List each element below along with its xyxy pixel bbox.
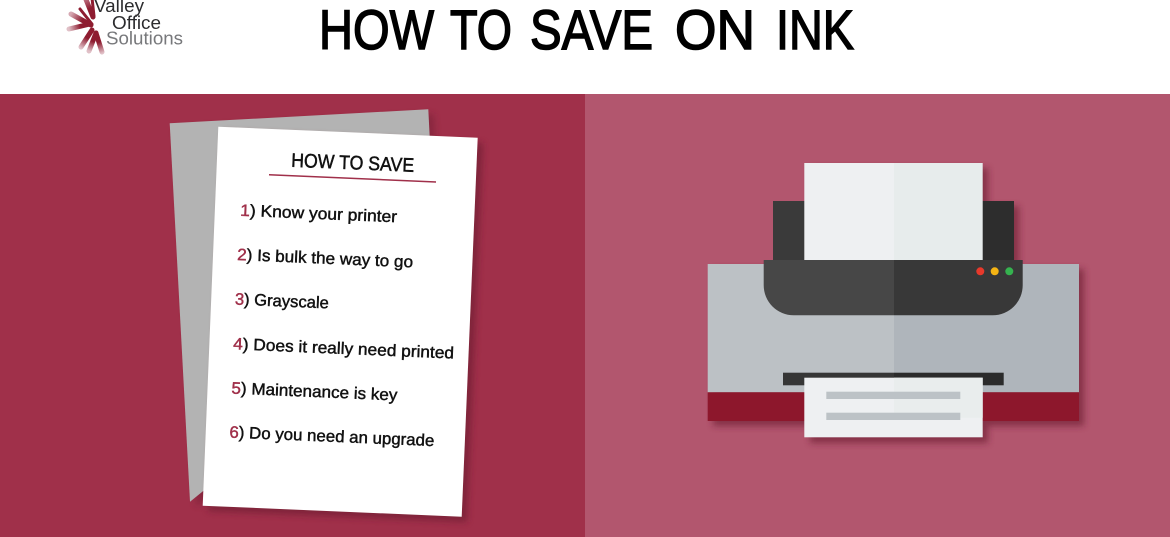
grey back sheet <box>170 109 445 507</box>
top cover <box>764 260 894 315</box>
title <box>319 0 854 61</box>
item 5: 5) Maintenance is key <box>231 380 399 404</box>
printed lines <box>826 392 960 399</box>
item 6: 6) Do you need an upgrade <box>229 424 435 450</box>
logo wordmark: Office <box>112 12 161 33</box>
white header band <box>0 0 1170 94</box>
list items <box>229 202 454 450</box>
item 2: 2) Is bulk the way to go <box>237 246 413 271</box>
status lights <box>976 267 1013 275</box>
output paper <box>804 378 983 437</box>
icon: pinwheel of maroon arrows <box>69 0 102 52</box>
logo wordmark: Solutions <box>106 27 183 48</box>
input paper <box>804 163 894 260</box>
stacked sheets with list <box>170 109 483 522</box>
icon: printer <box>708 163 1084 443</box>
printer body <box>708 264 894 392</box>
item 3: 3) Grayscale <box>235 291 329 312</box>
heading underline <box>269 175 436 182</box>
white front sheet <box>203 127 483 522</box>
item 1: 1) Know your printer <box>240 202 398 226</box>
paper tray back <box>773 201 894 261</box>
panel: right background <box>585 94 1170 537</box>
printer shadows <box>713 168 1084 443</box>
logo: Valley Office Solutions <box>69 0 183 52</box>
logo wordmark <box>94 0 183 48</box>
body base strip <box>708 392 1079 421</box>
output slot <box>783 373 894 385</box>
item 4: 4) Does it really need printed <box>233 335 454 363</box>
list heading: HOW TO SAVE <box>291 150 415 177</box>
panel: left background <box>0 94 585 537</box>
